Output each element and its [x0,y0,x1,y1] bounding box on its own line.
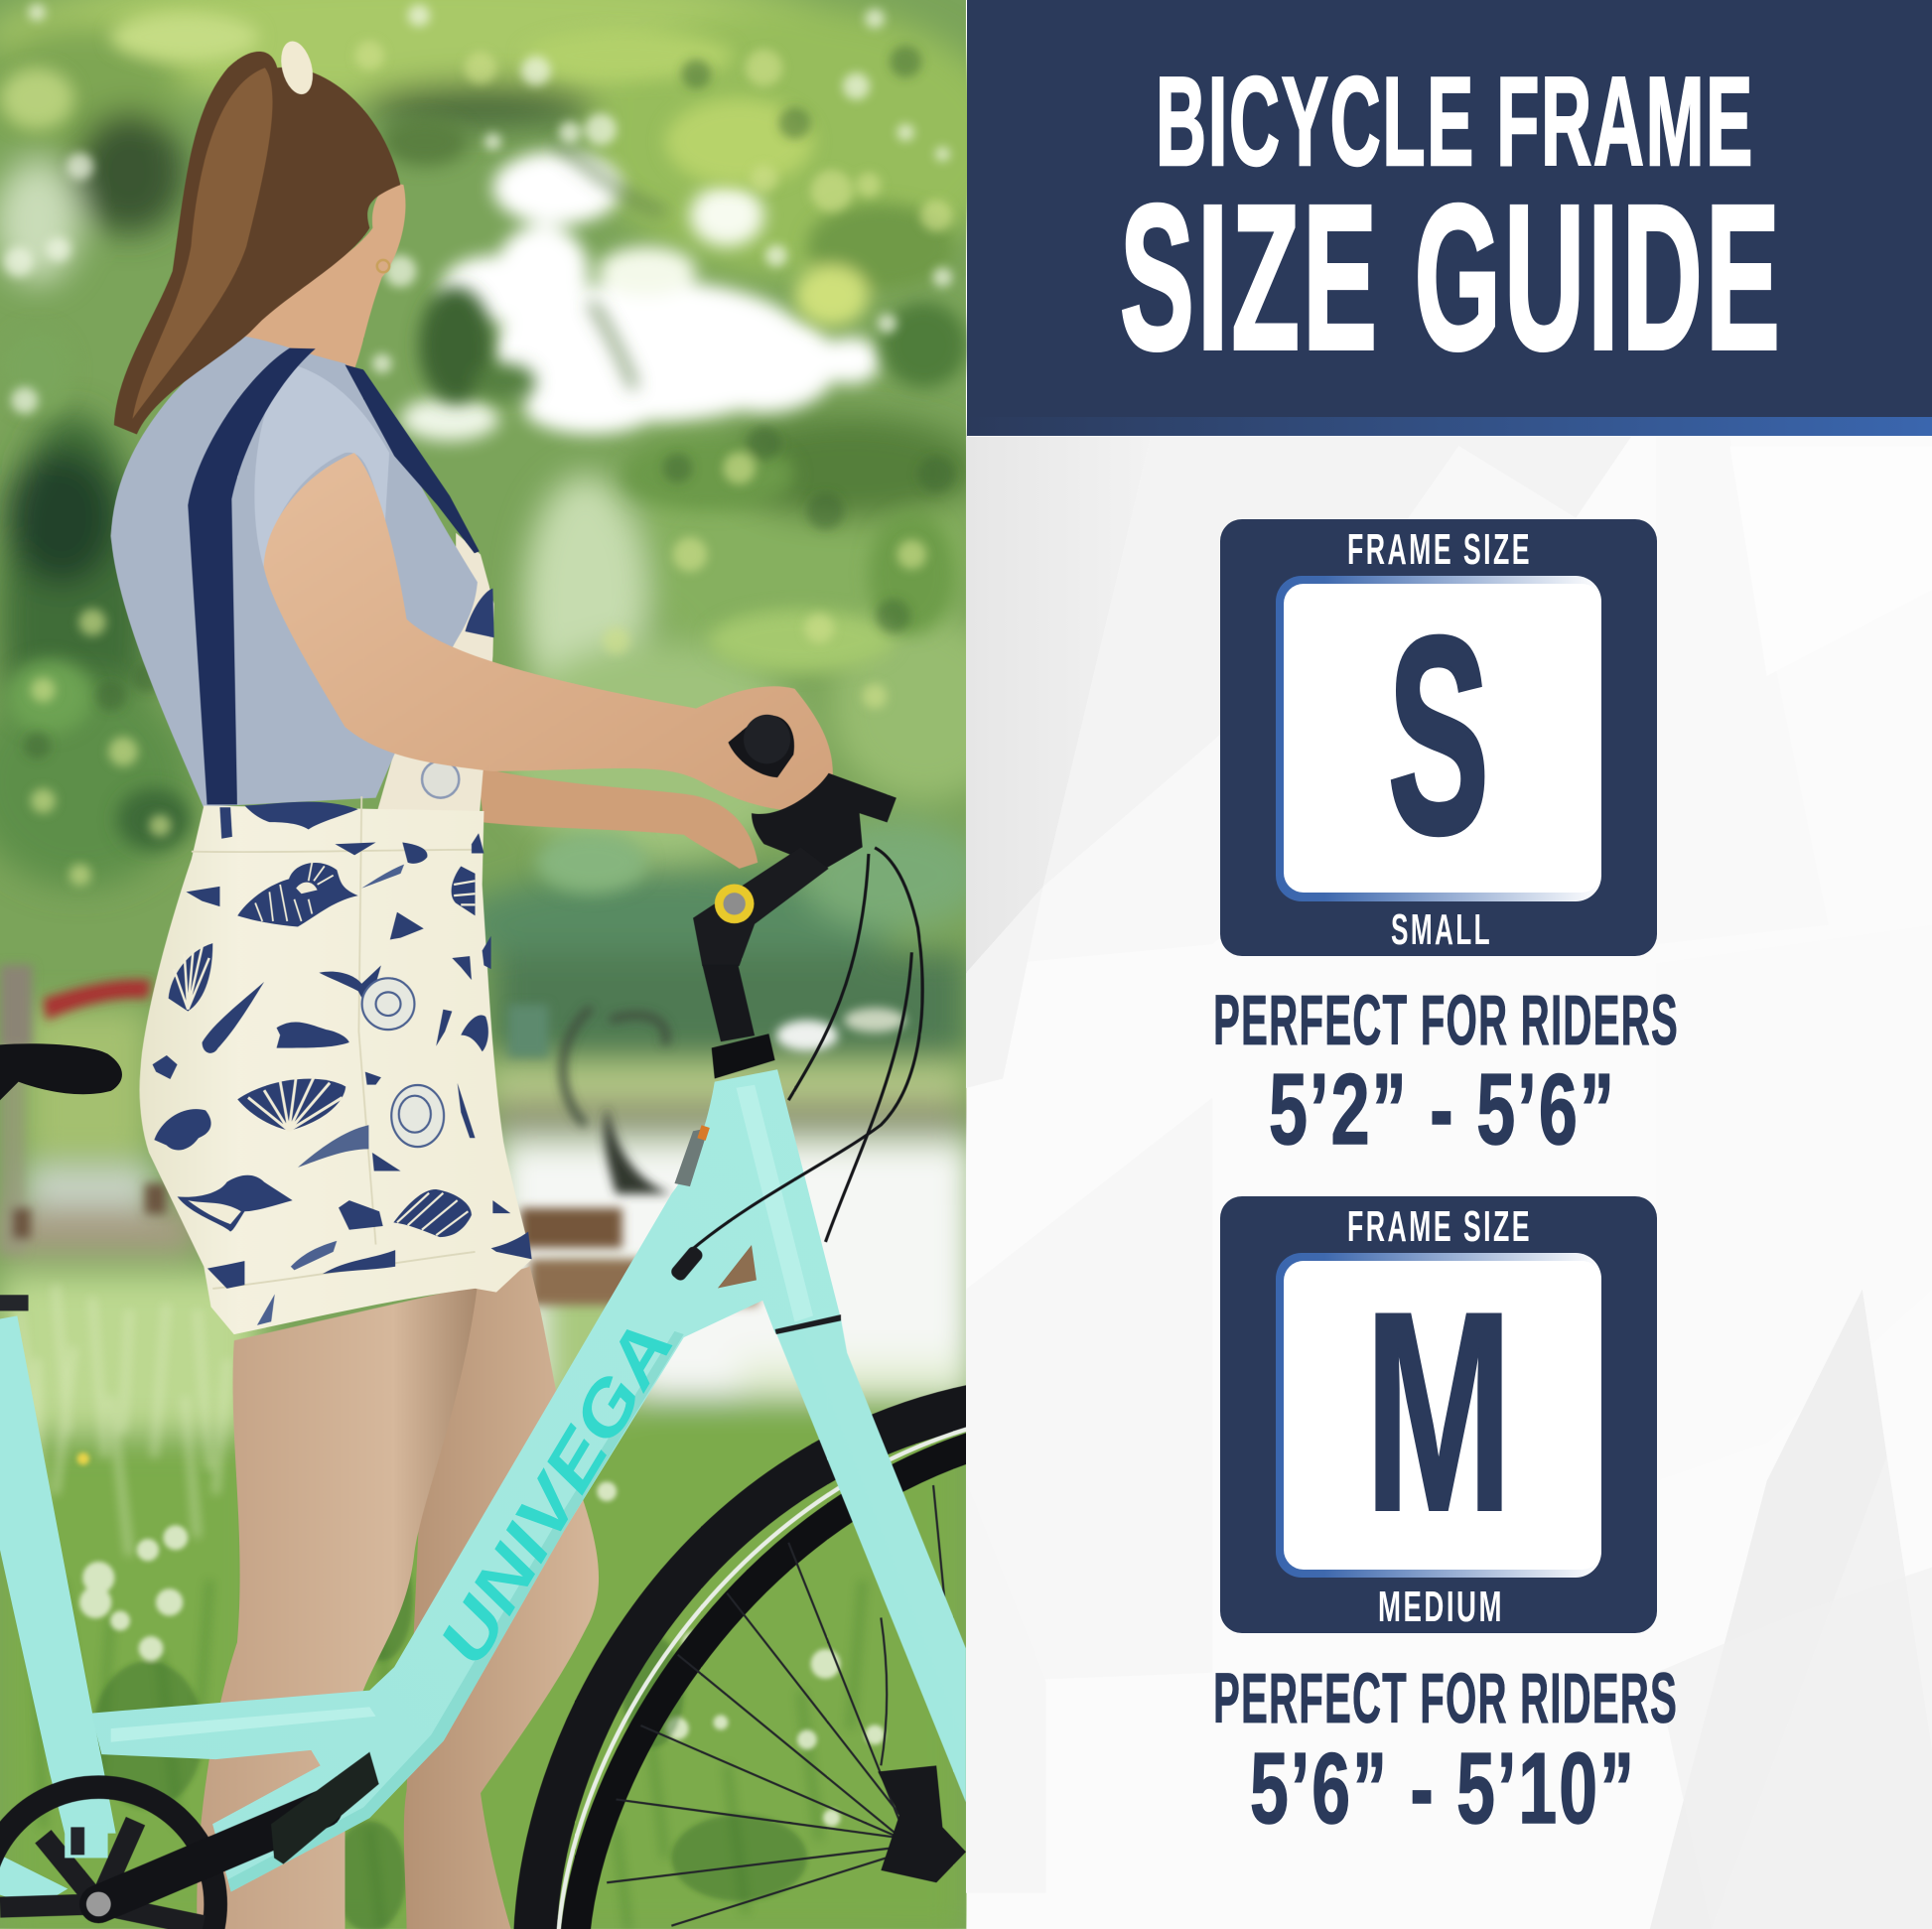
card bottom label: MEDIUM [1378,1583,1504,1631]
header band [967,0,1932,436]
size letter S: S [1388,579,1489,892]
bicycle: brake levers [752,773,897,869]
bicycle: saddle [0,1043,122,1100]
woman: near arm and hand [264,453,833,811]
waistband and seams [192,796,476,1289]
oyster [154,1109,211,1150]
bib shell print [465,589,494,637]
size letter M: M [1364,1252,1513,1571]
card top label: FRAME SIZE [1347,1202,1532,1251]
bicycle: chainring [0,1787,215,1929]
height range: small: 5’2” - 5’6” [1269,1054,1616,1166]
bicycle: crank arm [98,1809,324,1904]
bicycle: grip [728,715,794,777]
grass and flowers [19,1285,885,1929]
bicycle: spokes [607,1485,949,1926]
card bottom label: SMALL [1391,905,1492,954]
white inner square [1284,584,1601,893]
bib shell near waist [422,760,459,798]
woman: neck and ear [231,184,405,369]
card: frame size small [1220,519,1657,956]
rider height text: medium [1213,1660,1678,1845]
spiral shell [298,1125,368,1168]
fan shell [169,943,212,1012]
woman: bib of overalls [376,533,494,816]
bicycle: chain stay [0,1855,68,1907]
right scallop [393,1189,472,1237]
top shell [244,802,358,829]
bicycle: crank bolt [86,1892,111,1916]
bicycle: seat tube [0,1315,116,1834]
rider height text: small [1213,982,1679,1166]
card top label: FRAME SIZE [1347,525,1532,574]
bicycle: fork [776,1318,966,1803]
bicycle: yellow stem bolt [715,884,754,923]
panel: bicycle photo [0,0,1017,1929]
frame logo: UNIVEGA [424,1308,688,1678]
sky gaps between branches [400,151,881,441]
lower conch [178,1175,293,1232]
height range: medium: 5’6” - 5’10” [1250,1733,1636,1845]
woman: rear leg [404,1267,599,1929]
woman: scrunchie [276,38,318,97]
woman: sleeve highlight [254,363,389,567]
panel: faceted background [966,436,1932,1929]
bicycle: stem [693,847,829,966]
bicycle: cables [678,848,922,1273]
bicycle: disc brake [878,1765,966,1882]
woman: front strap and clip [345,364,480,553]
bicycle: rear tire and rim [535,1403,986,1929]
bicycle: cable stop [669,1244,705,1283]
right side shells [452,866,476,915]
card: frame size medium [1220,1196,1657,1633]
big scallop [237,1079,345,1131]
photo background: blurred trees, sky and water [0,0,1017,1929]
woman: earring [377,260,389,272]
bicycle: main frame [91,1069,841,1892]
clam and nautilus outlines [362,978,444,1147]
bicycle: pedal [271,1752,379,1864]
gradient frame [1276,576,1601,901]
woman: shorts with shell print [140,796,532,1334]
gradient frame [1276,1253,1601,1578]
bicycle: seat clamp [0,1295,29,1310]
big conch [237,863,358,926]
woman: front leg [197,1285,478,1929]
header accent bar [967,417,1932,436]
blurred branches and leaf clusters [0,12,967,894]
woman: navy strap [188,348,316,804]
bicycle: head tube collar and seatpost [702,965,841,1334]
woman: hair highlight [132,68,273,419]
cone shell [203,982,264,1053]
woman: ponytail and hair [114,52,400,434]
rough shell lower [339,1200,383,1230]
woman: grey t-shirt [111,335,478,807]
rough shells [277,1022,349,1048]
shell print [153,802,532,1325]
woman: far arm [478,767,758,869]
white inner square [1284,1261,1601,1570]
